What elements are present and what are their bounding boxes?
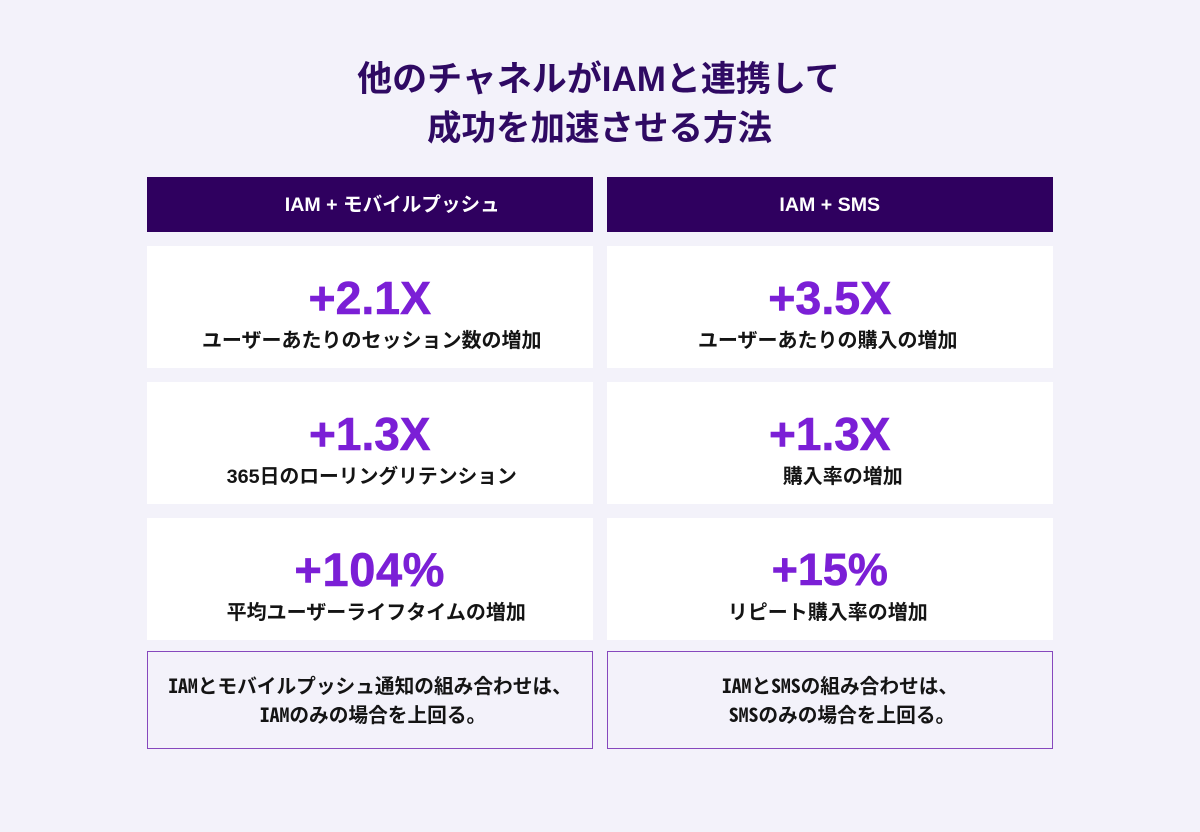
callout: mobile push summary — [147, 651, 593, 749]
panel: +3.5X: ユーザーあたりの購入の増加 — [698, 330, 958, 352]
panel: +15%: リピート購入率の増加 — [728, 602, 928, 624]
callout: SMS summary: IAMとSMSの組み合わせは、 — [722, 670, 958, 699]
panel: +2.1X: +2.1X — [308, 272, 431, 324]
panel: +15% — [607, 518, 1052, 640]
panel: +1.3X purchase rate: 購入率の増加 — [783, 466, 903, 488]
callout: mobile push summary: IAMとモバイルプッシュ通知の組み合わせは、 — [168, 670, 572, 699]
panel: +1.3X purchase rate: +1.3X — [769, 408, 890, 460]
panel: +1.3X purchase rate — [607, 382, 1052, 504]
panel: +1.3X retention — [147, 382, 592, 504]
panel: +2.1X: ユーザーあたりのセッション数の増加 — [202, 330, 542, 352]
panel: +3.5X: +3.5X — [768, 272, 891, 324]
panel: +2.1X — [147, 246, 592, 368]
panel: +1.3X retention: 365日のローリングリテンション — [227, 466, 517, 488]
panel: +15%: +15% — [772, 544, 888, 595]
title — [357, 60, 840, 148]
panel: +104% — [147, 518, 592, 640]
panel: +3.5X — [607, 246, 1052, 368]
title: 他のチャネルがIAMと連携して — [357, 60, 840, 98]
column header: IAM + mobile push: IAM + モバイルプッシュ — [285, 194, 500, 216]
panel: +1.3X retention: +1.3X — [309, 408, 430, 460]
column header: IAM + SMS: IAM + SMS — [779, 194, 880, 216]
callout: SMS summary: SMSのみの場合を上回る。 — [729, 699, 955, 728]
title: 成功を加速させる方法 — [427, 110, 772, 148]
callout: SMS summary — [607, 651, 1053, 749]
column header: IAM + mobile push — [147, 177, 592, 232]
panel: +104%: 平均ユーザーライフタイムの増加 — [227, 602, 526, 624]
column header: IAM + SMS — [607, 177, 1052, 232]
panel: +104%: +104% — [294, 543, 445, 596]
callout: mobile push summary: IAMのみの場合を上回る。 — [260, 699, 486, 728]
